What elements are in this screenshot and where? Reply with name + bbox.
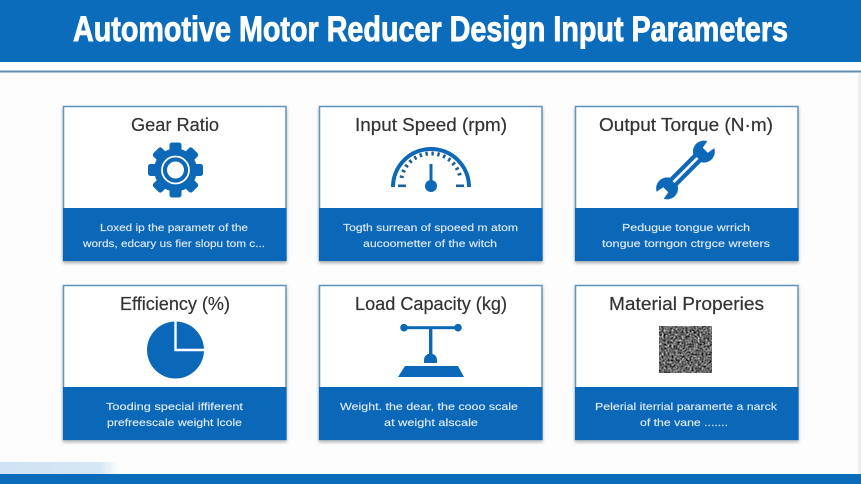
description: load capacity: at weight alscale bbox=[384, 417, 478, 429]
description: gear ratio: Loxed ip the parametr of the bbox=[100, 222, 248, 234]
description: input speed: Togth surrean of spoeed m atom bbox=[343, 222, 518, 234]
right edge strip bbox=[858, 73, 861, 474]
panel: output torque bbox=[575, 106, 798, 261]
header band bbox=[0, 0, 861, 72]
icon: pie chart bbox=[147, 319, 206, 378]
heading: output torque: Output Torque (N·m) bbox=[599, 115, 773, 135]
description: efficiency bbox=[106, 401, 243, 429]
panel: material properties bbox=[575, 286, 798, 440]
description: efficiency: Tooding special iffiferent bbox=[106, 401, 243, 413]
panel: load capacity bbox=[319, 286, 542, 440]
heading: gear ratio: Gear Ratio bbox=[131, 115, 219, 135]
description: output torque: tongue torngon ctrgce wreters bbox=[602, 238, 770, 250]
heading: input speed: Input Speed (rpm) bbox=[355, 115, 507, 135]
description: material properties: of the vane ....... bbox=[640, 417, 728, 429]
panel: gear ratio bbox=[63, 106, 286, 261]
description: gear ratio: words, edcary us fier slopu tom c... bbox=[82, 238, 265, 250]
icon: gear bbox=[148, 142, 203, 198]
icon: speedometer gauge bbox=[393, 149, 469, 192]
description: input speed bbox=[343, 222, 518, 250]
heading: load capacity: Load Capacity (kg) bbox=[355, 294, 507, 314]
footer fade bbox=[0, 462, 118, 474]
footer band bbox=[0, 474, 861, 484]
icon: wrench bbox=[650, 135, 721, 205]
description: input speed: aucoometter of the witch bbox=[363, 238, 497, 250]
heading: efficiency: Efficiency (%) bbox=[120, 294, 230, 314]
description: gear ratio bbox=[82, 222, 265, 250]
description: efficiency: prefreescale weight lcole bbox=[107, 417, 242, 429]
panel: efficiency bbox=[63, 286, 286, 440]
description: output torque: Pedugue tongue wrrich bbox=[622, 222, 750, 234]
description: material properties: Pelerial iterrial paramerte a narck bbox=[595, 401, 778, 413]
icon: load scale bbox=[398, 324, 464, 377]
heading: material properties: Material Properies bbox=[609, 294, 764, 314]
description: output torque bbox=[602, 222, 770, 250]
icon: material texture swatch bbox=[659, 326, 712, 373]
description: load capacity: Weight. the dear, the cooo scale bbox=[340, 401, 518, 413]
description: load capacity bbox=[340, 401, 518, 429]
description: material properties bbox=[595, 401, 778, 429]
panel: input speed bbox=[319, 106, 542, 261]
